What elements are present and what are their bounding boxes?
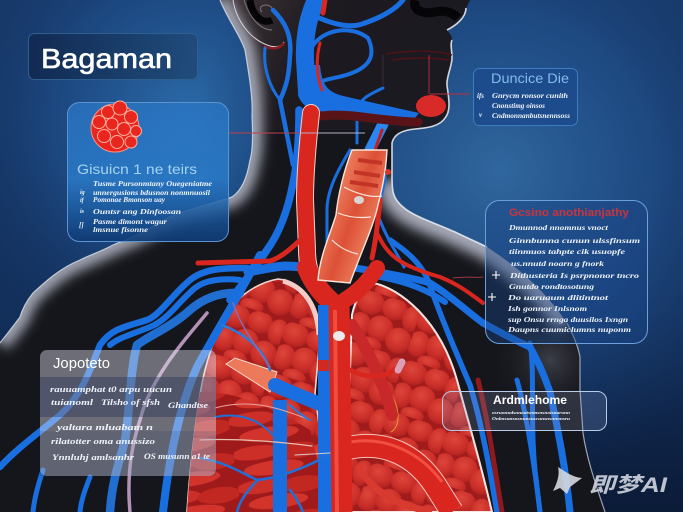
panel body text: OS musunn a1 te: [144, 452, 211, 461]
trachea: [318, 150, 387, 283]
right lung: [345, 283, 492, 512]
panel body text: [50, 385, 211, 462]
panel body text: rauuamphat t0 arpu uucun: [50, 385, 173, 394]
panel body text: ifs: [477, 92, 484, 100]
panel body text: Ginnbunna cunun ulssfinsum: [509, 236, 640, 245]
panel body text: Ynnluhj amlsanhr: [52, 453, 135, 462]
panel body text: Dithusteria Is psrpnonor tncro: [509, 271, 639, 280]
left lung pale rim: [283, 281, 319, 335]
panel body text: [79, 180, 212, 234]
throat nodule: [385, 169, 391, 175]
thin lung vessels: [200, 303, 398, 512]
panel body text: sup Onsu rrnga duusilos Ixngn: [507, 315, 628, 324]
watermark text: 即梦AI: [589, 474, 668, 497]
panel band: [40, 377, 216, 417]
panel body text: [477, 92, 570, 120]
panel body text: rilatotter oma anussizo: [51, 437, 155, 446]
blue veins, outer network: [0, 240, 570, 512]
panel heading: Gisuicn 1 ne teirs: [77, 161, 197, 177]
panel body text: Ghandtse: [168, 401, 209, 410]
panel heading: Duncice Die: [491, 70, 569, 86]
title box: [28, 34, 198, 80]
heading: Bagaman: [41, 43, 172, 74]
neck and head veins: [230, 0, 404, 300]
panel body text: [507, 223, 640, 334]
panel heading: Ardmlehome: [493, 395, 567, 407]
panel body text: unnergusions bdusnon nonmnuosil: [93, 189, 210, 197]
panel body text: Ish gonnor Inlsnom: [507, 304, 587, 313]
panel: top right: [474, 68, 578, 126]
icon: watermark star: [553, 467, 582, 494]
panel body text: Onbnsunsnsnunsuscunsnsnnonsru: [492, 416, 571, 421]
lower arc under arch: [358, 465, 432, 512]
panel body text: Gnutdo rondtosotung: [509, 282, 594, 291]
panel body text: Dmunnod nnomnus vnoct: [508, 223, 609, 232]
plus markers: [488, 271, 500, 301]
central vein: [318, 305, 332, 512]
pointer lines: [229, 55, 470, 133]
panel body text: Cnonstimg oinsos: [492, 102, 545, 110]
panel heading: Jopoteto: [53, 355, 110, 372]
panel body text: ig: [80, 190, 85, 196]
panel body text: Do uaruaum dlitintnot: [507, 293, 609, 302]
panel body text: Gnrycm ronsor cunith: [492, 92, 568, 100]
jaw vein: [298, 65, 419, 118]
panel body text: v: [479, 111, 483, 119]
aortic marker: [333, 331, 345, 341]
panel body text: osruonudsnnoatsnmsnsnoisnaronn: [492, 410, 571, 415]
panel body text: []: [79, 221, 84, 229]
panel body text: yaltara mluabam n: [55, 423, 154, 432]
chin nodule: [416, 95, 446, 117]
icon: red cell cluster: [91, 101, 142, 152]
left lung lower lobe: [187, 392, 330, 512]
panel: bottom right: [442, 392, 606, 430]
panel body text: Daupns cuumiclumns nuponm: [507, 325, 631, 334]
panel body text: Cndmonnanbutsnennsoss: [492, 112, 570, 120]
pulmonary tissue band: [352, 325, 392, 415]
panel body text: Tusme Pursonmtany Ouegeniatme: [93, 180, 212, 188]
left lung: [187, 279, 330, 512]
panel: right: [486, 200, 648, 344]
panel heading: Gcsino anothianjathy: [509, 207, 630, 219]
panel body text: tuianoml: [51, 398, 94, 407]
panel body text: Ountsr ang Dinfoosan: [93, 208, 181, 216]
panel: top left: [68, 101, 228, 242]
central stub artery: [318, 360, 329, 371]
aorta: [335, 300, 342, 512]
left lung bronchus: [226, 358, 325, 406]
aortic arch: [348, 441, 452, 512]
panel body text: Pasme dimont wagur: [93, 218, 167, 226]
pulmonary branch: [350, 362, 402, 376]
panel: bottom left: [40, 350, 216, 476]
panel body text: [492, 410, 571, 421]
panel body text: tiinmuos tahpte cik usuopfe: [509, 247, 626, 256]
panel body text: lmsnue fisonne: [93, 226, 148, 234]
panel body text: Tilsho of sfsh: [101, 398, 161, 407]
lower left vein: [273, 400, 287, 512]
panel body text: Pomonae Bmonson uay: [93, 196, 166, 204]
panel body text: us.nnutd noarn g fnork: [511, 259, 604, 268]
ear: [233, 0, 284, 48]
arteries: [198, 0, 483, 306]
watermark: [553, 467, 668, 497]
panel body text: if: [80, 198, 85, 204]
panel band lower: [40, 431, 216, 476]
panel body text: is: [80, 209, 85, 215]
